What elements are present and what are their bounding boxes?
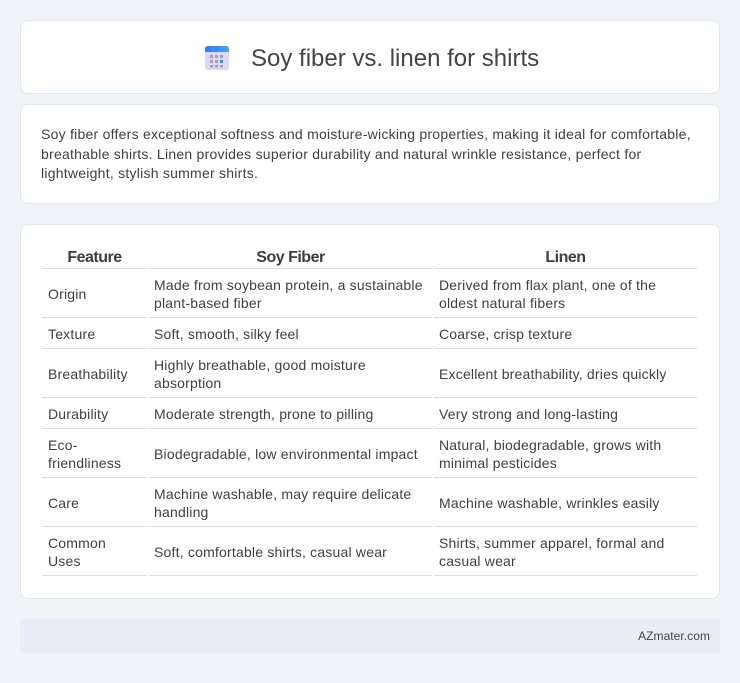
row: Common Uses: Uses	[48, 553, 81, 569]
text: Coarse, crisp texture	[439, 326, 572, 342]
summary text: breathable shirts. Linen provides superior durability and natural wrinkle resistance, perfect for	[41, 146, 641, 162]
footer bar	[20, 619, 720, 653]
row: Common Uses	[48, 535, 106, 569]
text: Natural, biodegradable, grows with	[439, 437, 661, 453]
title: Soy fiber vs. linen for shirts	[251, 45, 539, 72]
row: Texture: Texture	[48, 326, 95, 342]
text: Soft, smooth, silky feel	[154, 326, 299, 342]
table header: Soy Fiber: Soy Fiber	[256, 249, 325, 266]
text: plant-based fiber	[154, 295, 262, 311]
panel: comparison table card	[20, 224, 720, 599]
panel: title card	[20, 20, 720, 94]
row: Eco-friendliness	[48, 437, 121, 471]
text: oldest natural fibers	[439, 295, 565, 311]
row: Durability: Durability	[48, 406, 108, 422]
text: casual wear	[439, 553, 516, 569]
text: Very strong and long-lasting	[439, 406, 618, 422]
text: Made from soybean protein, a sustainable	[154, 277, 423, 293]
text: Machine washable, wrinkles easily	[439, 495, 660, 511]
text: Shirts, summer apparel, formal and	[439, 535, 664, 551]
text: Machine washable, may require delicate	[154, 486, 411, 502]
row: Eco-friendliness: Eco-	[48, 437, 78, 453]
row: Common Uses: Common	[48, 535, 106, 551]
row: Eco-friendliness: friendliness	[48, 455, 121, 471]
row: Origin: Origin	[48, 286, 87, 302]
text: Moderate strength, prone to pilling	[154, 406, 373, 422]
text: Excellent breathability, dries quickly	[439, 366, 667, 382]
summary text: Soy fiber offers exceptional softness and moisture-wicking properties, making it ideal for comfortable,	[41, 126, 691, 142]
text: handling	[154, 504, 209, 520]
text: Derived from flax plant, one of the	[439, 277, 656, 293]
row: Care: Care	[48, 495, 79, 511]
summary text: lightweight, stylish summer shirts.	[41, 165, 258, 181]
footer credit: AZmater.com	[638, 629, 710, 643]
text: Highly breathable, good moisture	[154, 357, 366, 373]
summary text	[41, 126, 691, 181]
panel: summary card	[20, 104, 720, 204]
table header: Linen: Linen	[545, 249, 586, 266]
row: Breathability: Breathability	[48, 366, 128, 382]
text: absorption	[154, 375, 221, 391]
text: minimal pesticides	[439, 455, 557, 471]
text: Biodegradable, low environmental impact	[154, 446, 418, 462]
table header: Feature: Feature	[67, 249, 122, 266]
text: Soft, comfortable shirts, casual wear	[154, 544, 387, 560]
icon: calendar	[205, 46, 229, 70]
